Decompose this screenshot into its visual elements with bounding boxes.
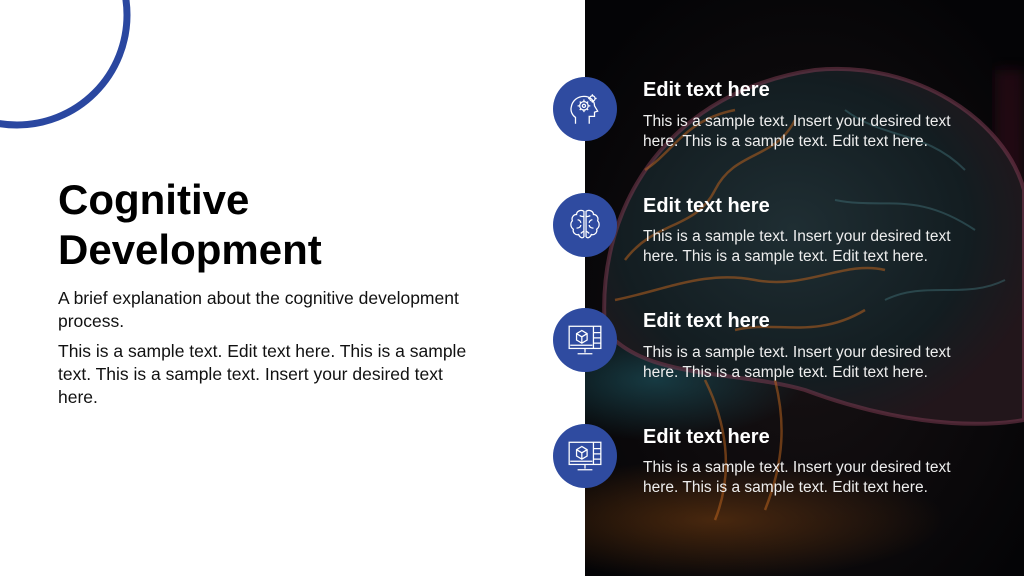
item 3 heading: Edit text here xyxy=(643,310,770,332)
icon: head with gears xyxy=(553,77,617,141)
icon: monitor cube 2 xyxy=(553,424,617,488)
icon: brain xyxy=(553,193,617,257)
dark image panel: brain xyxy=(585,0,1024,576)
item 1 text: This is a sample text. Insert your desired text here. This is a sample text. Edit text here. xyxy=(643,113,951,150)
item 1 heading: Edit text here xyxy=(643,79,770,101)
item 3 text: This is a sample text. Insert your desired text here. This is a sample text. Edit text here. xyxy=(643,344,951,381)
body text: This is a sample text. Edit text here. This is a sample text. This is a sample text. Insert your desired text here. xyxy=(58,341,466,407)
item 4 heading: Edit text here xyxy=(643,426,770,448)
item 2 text: This is a sample text. Insert your desired text here. This is a sample text. Edit text here. xyxy=(643,228,951,265)
subtitle text: A brief explanation about the cognitive development process. xyxy=(58,288,459,331)
title: Development xyxy=(58,226,322,273)
item 4 text: This is a sample text. Insert your desired text here. This is a sample text. Edit text here. xyxy=(643,459,951,496)
title xyxy=(58,176,322,273)
item 2 heading: Edit text here xyxy=(643,195,770,217)
icon: monitor cube xyxy=(553,308,617,372)
decorative arc xyxy=(0,0,130,128)
title: Cognitive xyxy=(58,176,249,223)
